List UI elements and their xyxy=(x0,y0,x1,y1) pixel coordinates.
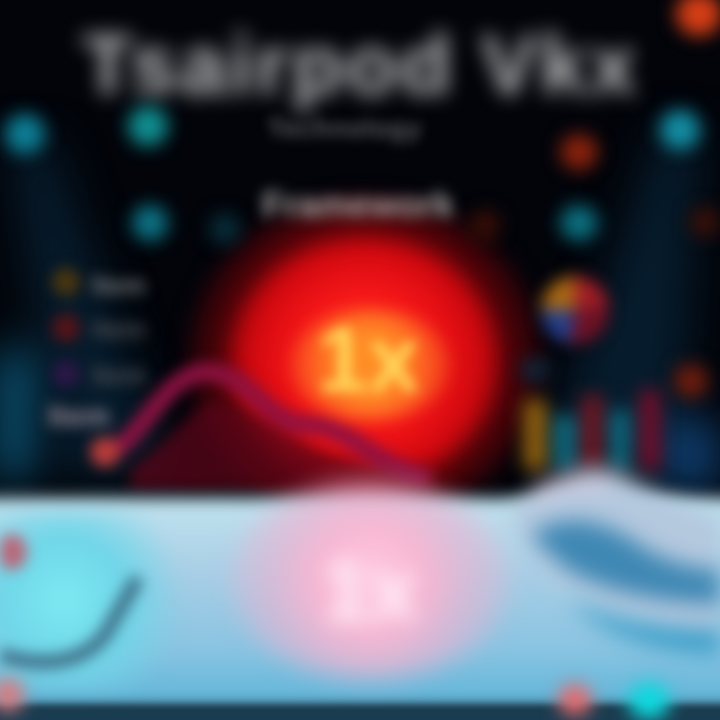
red glow halo xyxy=(190,200,540,520)
icon: curved stylus on surface xyxy=(0,526,150,678)
icon: list marker 2 xyxy=(52,314,80,342)
icon: teal dots xyxy=(0,0,720,252)
bar chart xyxy=(511,352,672,482)
pie chart icon xyxy=(532,264,619,354)
bottom accent dots xyxy=(0,667,681,720)
surface glow xyxy=(0,510,190,690)
center value glow xyxy=(290,310,450,420)
icon: list marker 1 xyxy=(52,268,80,296)
subheading: Framework xyxy=(262,184,454,225)
title: Tsairpod Vkx xyxy=(82,18,639,112)
reflected value: 1x xyxy=(322,543,418,639)
red glowing circle xyxy=(232,238,497,483)
panel: light blue table surface xyxy=(0,498,720,708)
center value: 1x xyxy=(317,309,419,411)
list label 3: Item xyxy=(92,360,145,390)
bottom dark strip xyxy=(0,706,720,720)
list label 2: Item xyxy=(92,314,145,344)
list label 4: Item xyxy=(48,400,110,433)
left list of items xyxy=(40,262,151,434)
pink reflection xyxy=(230,480,510,680)
icon: list marker 3 xyxy=(52,360,80,388)
hand illustration xyxy=(508,452,720,666)
list label 1: Item xyxy=(92,270,145,300)
subtitle: Technology xyxy=(268,113,422,143)
